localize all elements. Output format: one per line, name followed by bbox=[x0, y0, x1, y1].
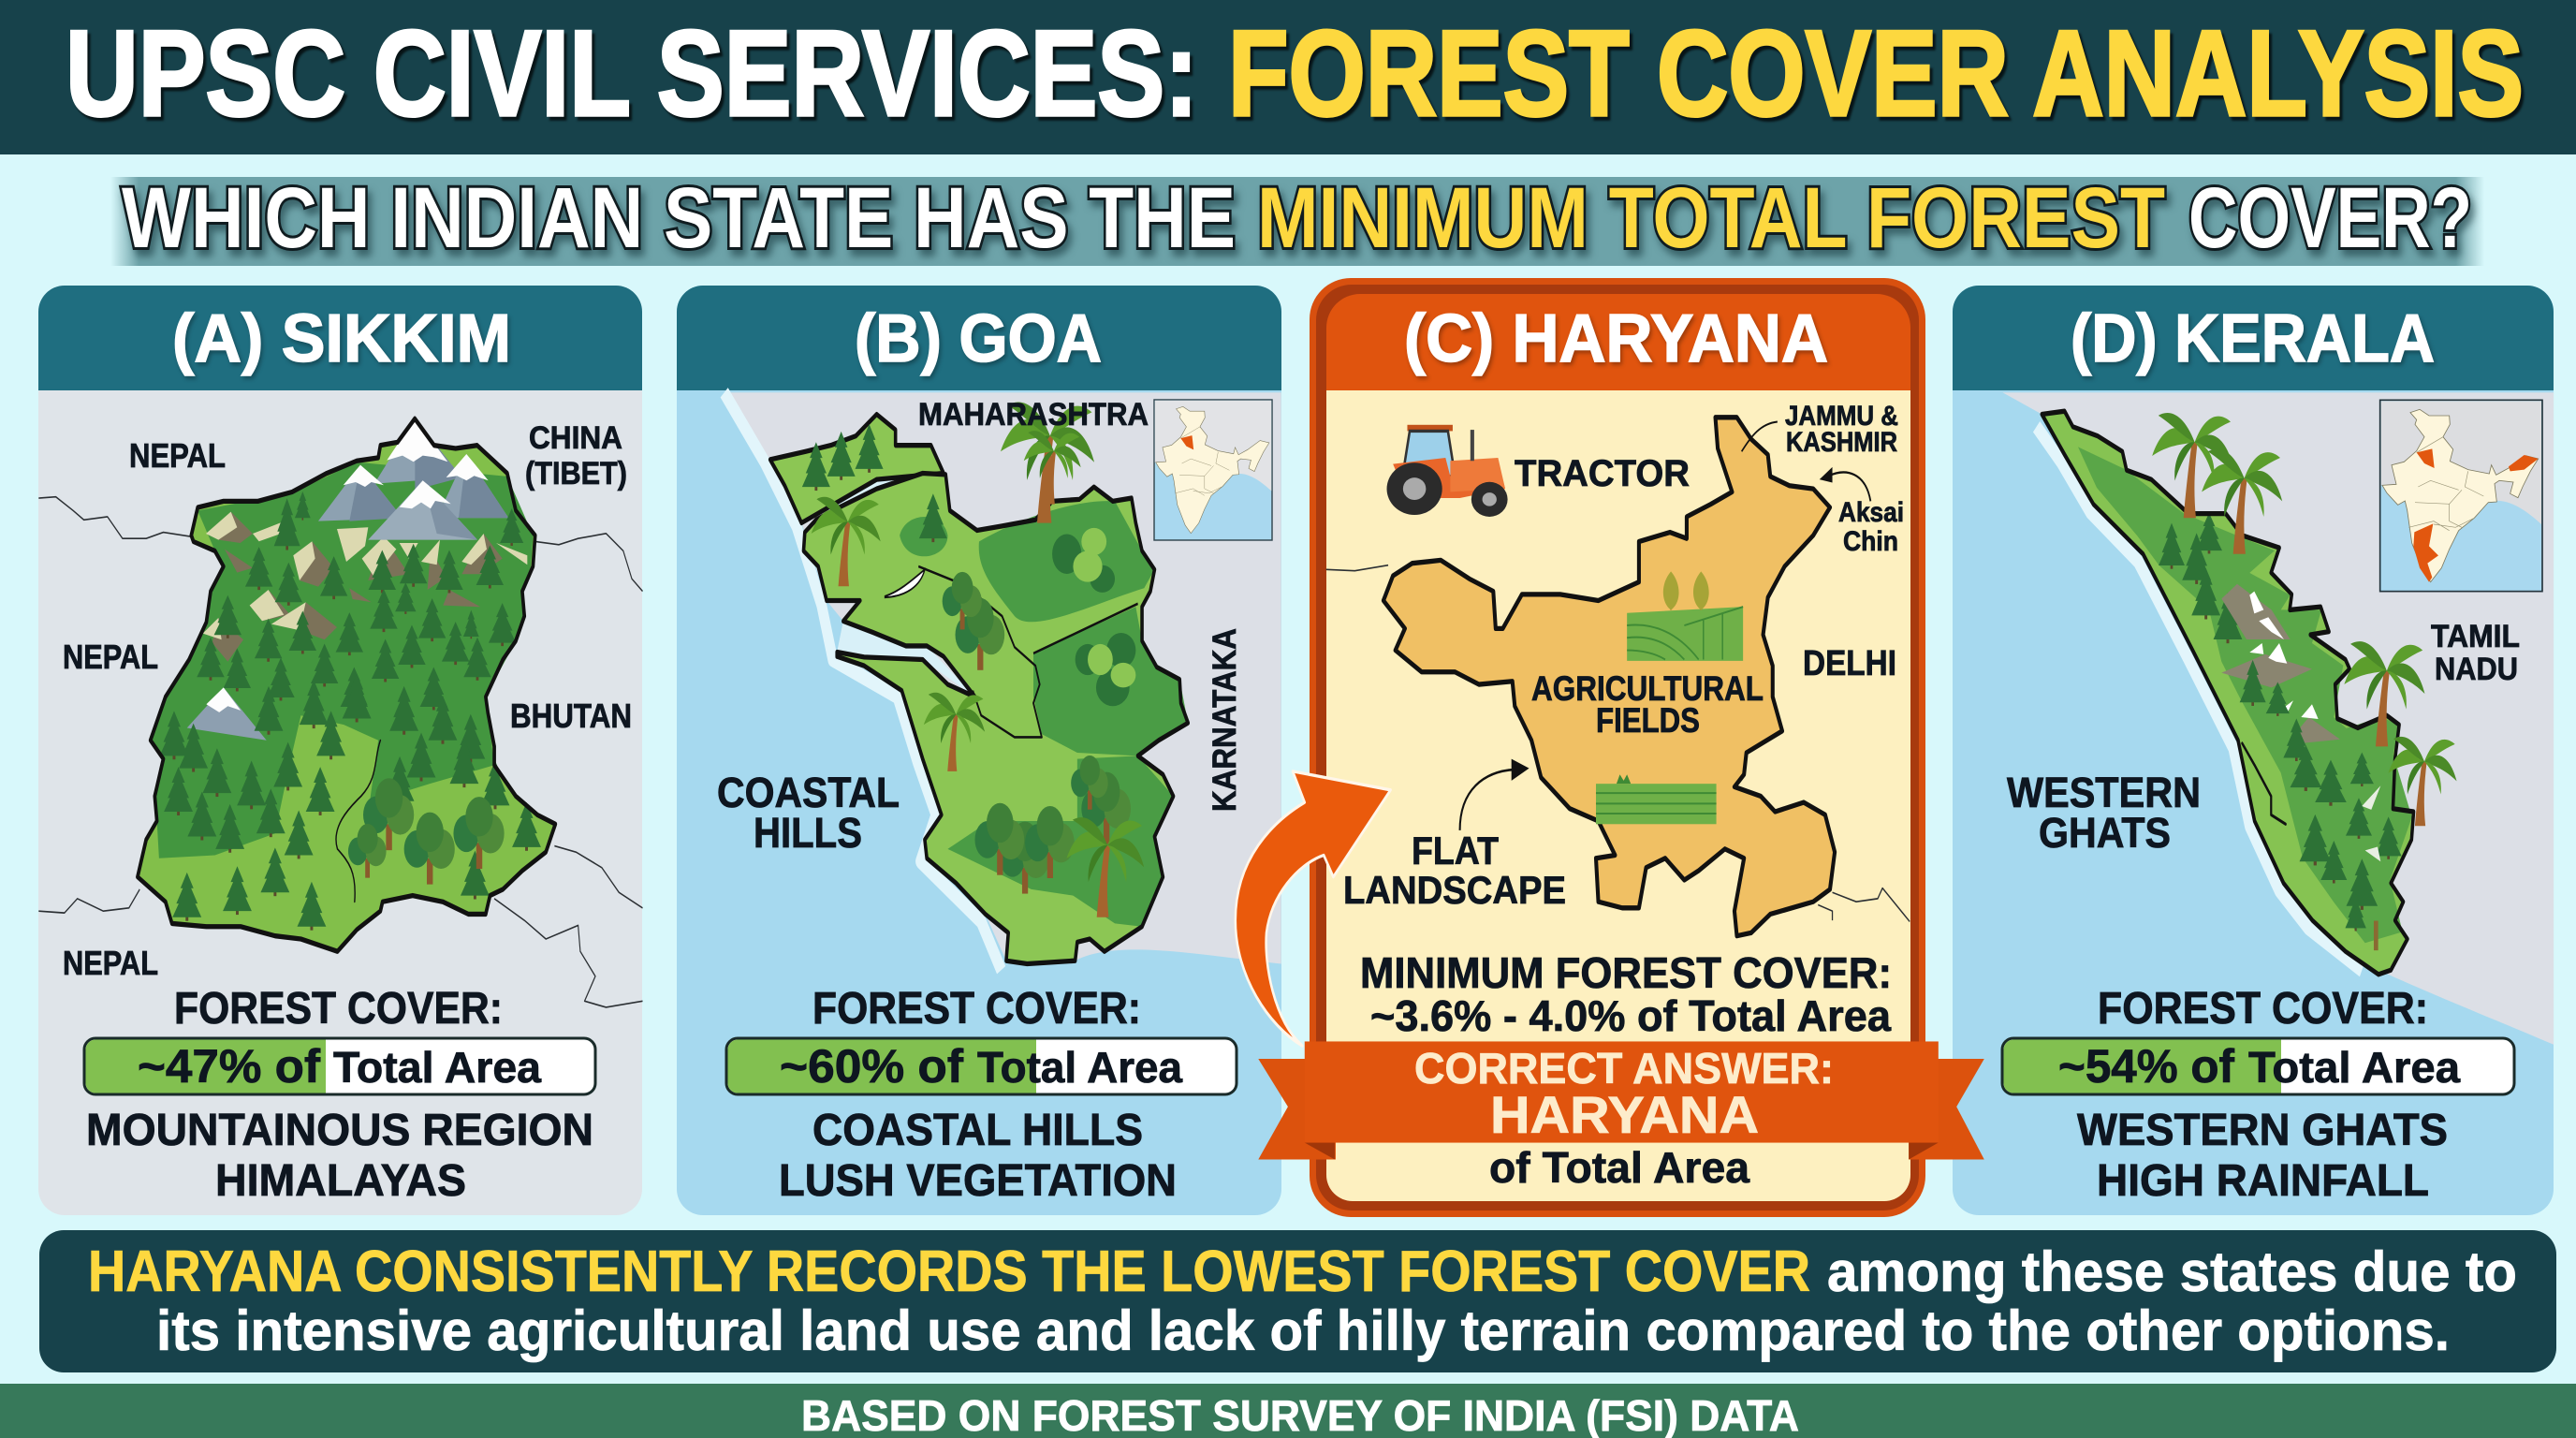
conclusion panel: its intensive agricultural land use and lack of hilly terrain compared to the other options. bbox=[156, 1299, 2450, 1362]
Kerala land bbox=[2042, 411, 2414, 975]
map labels A: BHUTAN bbox=[510, 697, 632, 735]
map labels C: AGRICULTURAL bbox=[1531, 669, 1764, 708]
forest cover stat B: ~60% of bbox=[780, 1040, 963, 1093]
ribbon: correct answer bbox=[1258, 1041, 1984, 1159]
heading: C Haryana: (C) HARYANA bbox=[1404, 301, 1828, 376]
forest cover stat B: Total Area bbox=[977, 1043, 1182, 1092]
mountains, rocky foothills and upper forest bbox=[197, 418, 527, 710]
small snow mountain bbox=[187, 687, 267, 741]
question banner bbox=[110, 170, 2484, 266]
ribbon: correct answer: HARYANA bbox=[1490, 1085, 1759, 1144]
caption A bbox=[86, 1106, 593, 1206]
minimum forest cover stat bbox=[1360, 948, 1892, 1040]
map labels B: KARNATAKA bbox=[1207, 628, 1243, 812]
map labels A: (TIBET) bbox=[525, 456, 627, 492]
forest cover stat D bbox=[2002, 984, 2514, 1094]
arrow: big curved pointer to Haryana bbox=[1236, 771, 1391, 1046]
title bbox=[66, 5, 2524, 141]
forest cover stat A bbox=[84, 984, 595, 1094]
map labels A: NEPAL bbox=[63, 944, 158, 982]
panel: option D Kerala bbox=[1953, 286, 2554, 1215]
map labels B: HILLS bbox=[754, 809, 862, 857]
question banner: WHICH INDIAN STATE HAS THE bbox=[122, 170, 1236, 266]
estuary gaps bbox=[805, 474, 974, 697]
question banner: COVER? bbox=[2188, 170, 2472, 266]
caption B: COASTAL HILLS bbox=[812, 1106, 1143, 1155]
river mouth bbox=[886, 569, 925, 597]
heading: A Sikkim: (A) SIKKIM bbox=[172, 301, 511, 376]
icon: crop field bottom bbox=[1596, 774, 1717, 824]
forest cover stat D: Total Area bbox=[2248, 1043, 2460, 1092]
forest cover stat A: FOREST COVER: bbox=[174, 984, 503, 1034]
caption B bbox=[779, 1106, 1177, 1206]
forest cover stat D: ~54% of bbox=[2058, 1040, 2234, 1093]
map labels D: NADU bbox=[2435, 652, 2518, 687]
map labels D: GHATS bbox=[2039, 809, 2171, 857]
forest cover stat B: FOREST COVER: bbox=[812, 984, 1141, 1034]
map labels C: TRACTOR bbox=[1515, 453, 1690, 494]
map labels C: JAMMU & bbox=[1785, 401, 1898, 432]
map labels C: FIELDS bbox=[1596, 701, 1700, 740]
northern Goa land bbox=[770, 415, 944, 523]
caption B: LUSH VEGETATION bbox=[779, 1156, 1177, 1206]
main Goa land bbox=[803, 474, 1188, 964]
inset map of India D bbox=[2380, 400, 2542, 592]
map labels D: WESTERN bbox=[2007, 769, 2201, 816]
map: Goa bbox=[724, 392, 1281, 970]
caption C: of Total Area bbox=[1489, 1143, 1749, 1192]
panel: option C Haryana (correct answer) bbox=[1310, 278, 1925, 1217]
footer source bar bbox=[0, 1384, 2576, 1438]
question banner: MINIMUM TOTAL FOREST bbox=[1257, 170, 2165, 266]
map labels B bbox=[717, 397, 1243, 857]
map labels C: Chin bbox=[1843, 526, 1898, 557]
heading: D Kerala: (D) KERALA bbox=[2071, 301, 2435, 376]
inset map of India B bbox=[1154, 400, 1272, 540]
forest and peaks bbox=[2078, 447, 2412, 950]
map labels C: DELHI bbox=[1803, 644, 1896, 683]
map labels A: NEPAL bbox=[129, 436, 226, 475]
map labels C: FLAT bbox=[1412, 829, 1499, 873]
map labels C bbox=[1343, 401, 1904, 912]
caption A: MOUNTAINOUS REGION bbox=[86, 1106, 593, 1155]
map labels A: NEPAL bbox=[63, 638, 158, 676]
icon: tractor bbox=[1387, 425, 1508, 517]
palm trees bbox=[2152, 413, 2457, 826]
ribbon: correct answer: CORRECT ANSWER: bbox=[1414, 1044, 1834, 1093]
map labels D bbox=[2007, 619, 2520, 857]
map labels D: TAMIL bbox=[2431, 619, 2520, 654]
map: Kerala bbox=[2002, 392, 2554, 1045]
forest cover stat A: Total Area bbox=[333, 1043, 541, 1092]
forest cover stat B bbox=[726, 984, 1237, 1094]
panel: option B Goa bbox=[677, 286, 1281, 1215]
map labels A bbox=[63, 420, 632, 982]
map labels C: LANDSCAPE bbox=[1343, 868, 1566, 912]
map labels C: KASHMIR bbox=[1786, 427, 1897, 458]
panel: option A Sikkim bbox=[38, 286, 643, 1215]
conclusion panel: among these states due to bbox=[1827, 1240, 2517, 1303]
map: Haryana bbox=[1326, 418, 1910, 936]
forest cover stat A: ~47% of bbox=[138, 1040, 320, 1093]
arrow: Aksai Chin pointer bbox=[1820, 467, 1870, 501]
header bar with title bbox=[0, 0, 2576, 154]
trees and palms bbox=[802, 402, 1144, 917]
forest cover stat D: FOREST COVER: bbox=[2098, 984, 2428, 1034]
map labels A: CHINA bbox=[529, 420, 622, 456]
caption D: HIGH RAINFALL bbox=[2097, 1156, 2429, 1206]
map labels C: Aksai bbox=[1838, 497, 1904, 528]
map: Sikkim bbox=[38, 418, 643, 1007]
conclusion panel bbox=[39, 1230, 2556, 1372]
caption A: HIMALAYAS bbox=[215, 1156, 466, 1206]
caption D: WESTERN GHATS bbox=[2077, 1106, 2448, 1155]
arrow: Jammu and Kashmir pointer bbox=[1742, 421, 1778, 451]
heading: B Goa: (B) GOA bbox=[855, 301, 1102, 376]
title: UPSC CIVIL SERVICES: bbox=[66, 5, 1198, 141]
map labels B: COASTAL bbox=[717, 769, 900, 816]
map labels B: MAHARASHTRA bbox=[918, 397, 1149, 433]
caption D bbox=[2077, 1106, 2448, 1206]
arrow: flat landscape pointer bbox=[1460, 759, 1530, 830]
icon: crop field top bbox=[1627, 571, 1743, 661]
dense forest patches bbox=[900, 501, 1188, 927]
conclusion panel: HARYANA CONSISTENTLY RECORDS THE LOWEST FOREST COVER bbox=[88, 1240, 1810, 1304]
lower forest trees bbox=[160, 674, 541, 931]
minimum forest cover stat: MINIMUM FOREST COVER: bbox=[1360, 948, 1892, 997]
minimum forest cover stat: ~3.6% - 4.0% of Total Area bbox=[1370, 991, 1891, 1040]
